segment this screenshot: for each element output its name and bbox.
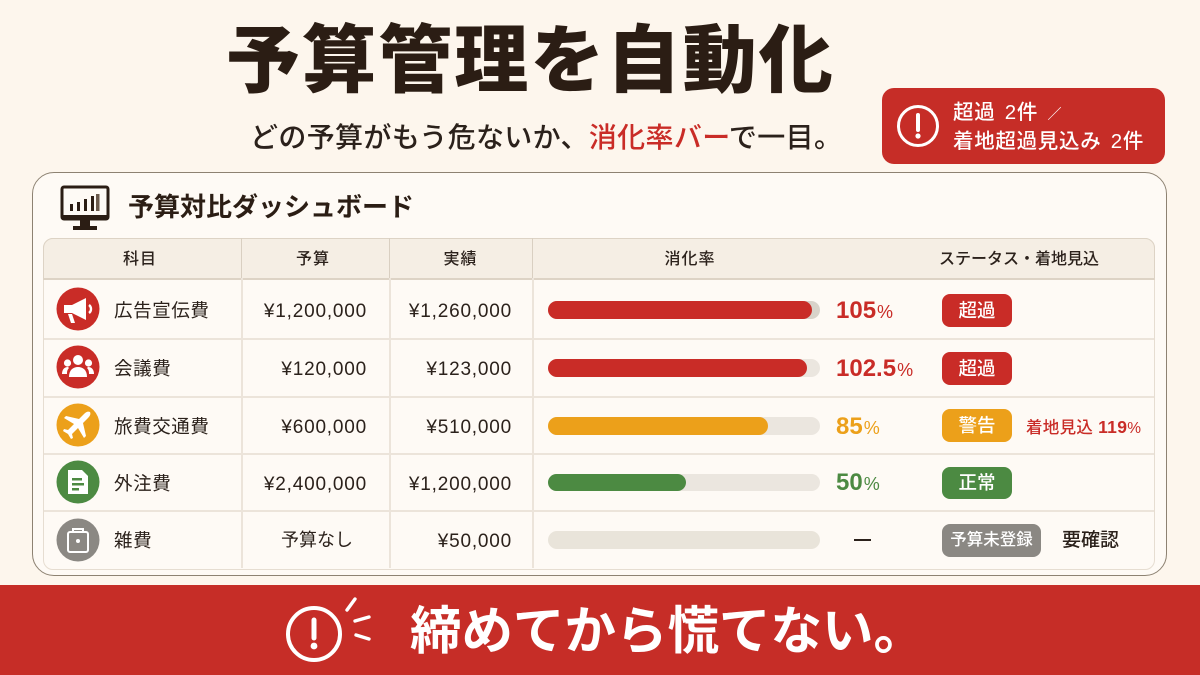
footer banner xyxy=(0,585,1200,675)
column header: ステータス・着地見込: ステータス・着地見込 xyxy=(939,251,1099,268)
row 2 icon: people xyxy=(56,346,100,388)
row 2 budget: ¥120,000 xyxy=(281,359,367,380)
badge text xyxy=(953,101,1144,153)
row 3 actual: ¥510,000 xyxy=(426,417,512,438)
row 2 percent: 102.5% xyxy=(836,355,913,382)
row 2 name: 会議費 xyxy=(114,358,171,379)
row 4 bar xyxy=(548,474,820,491)
icon: exclamation with rays xyxy=(286,597,371,662)
row 3 bar xyxy=(548,417,820,435)
row 3 landing forecast: 着地見込 119% xyxy=(1026,417,1141,437)
title: 予算管理を自動化 xyxy=(226,19,835,102)
badge text: 超過 2件 ／ xyxy=(953,101,1062,124)
row 2 actual: ¥123,000 xyxy=(426,359,512,380)
row 4 status: 正常 xyxy=(958,472,996,493)
row 3 name: 旅費交通費 xyxy=(114,416,210,437)
row 3 icon: airplane xyxy=(56,404,100,446)
footer message: 締めてから慌てない。 xyxy=(410,602,925,660)
row 1 percent: 105% xyxy=(836,297,893,324)
row 4 actual: ¥1,200,000 xyxy=(409,474,512,495)
card heading: 予算対比ダッシュボード xyxy=(128,192,414,222)
table header band xyxy=(43,238,1155,280)
row 5 status: 予算未登録 xyxy=(950,531,1033,549)
subtitle: どの予算がもう危ないか、消化率バーで一目。 xyxy=(250,122,842,153)
row 1 bar xyxy=(548,301,820,319)
row 2 bar xyxy=(548,359,820,377)
row 3 status: 警告 xyxy=(958,415,996,436)
row 5 status xyxy=(942,524,1041,557)
row 5 name: 雑費 xyxy=(114,530,152,551)
column header: 実績: 実績 xyxy=(443,251,478,268)
row 5 actual: ¥50,000 xyxy=(438,531,512,552)
row 1 status: 超過 xyxy=(958,300,996,321)
table frame xyxy=(43,238,1155,570)
row 5 budget: 予算なし xyxy=(281,530,353,550)
row 3 percent: 85% xyxy=(836,413,880,440)
row 5 icon: bag xyxy=(56,518,100,562)
row 3 status xyxy=(942,409,1012,442)
column header: 予算: 予算 xyxy=(296,251,330,268)
row 1 icon: megaphone xyxy=(56,288,100,330)
icon: monitor chart xyxy=(60,186,110,230)
row 4 name: 外注費 xyxy=(114,473,171,494)
badge text: 着地超過見込み 2件 xyxy=(953,130,1144,153)
alert badge xyxy=(882,88,1165,164)
row 1 budget: ¥1,200,000 xyxy=(264,301,367,322)
row 4 budget: ¥2,400,000 xyxy=(264,474,367,495)
row 2 status: 超過 xyxy=(958,358,996,379)
row 4 percent: 50% xyxy=(836,469,880,496)
row 1 status xyxy=(942,294,1012,327)
column header: 消化率: 消化率 xyxy=(664,251,716,268)
row 4 icon: document xyxy=(56,460,100,504)
row 5 bar xyxy=(548,531,820,549)
column header: 科目: 科目 xyxy=(123,251,157,268)
panel: dashboard card xyxy=(32,172,1167,576)
row 4 status xyxy=(942,467,1012,499)
row 3 budget: ¥600,000 xyxy=(281,417,367,438)
row 2 status xyxy=(942,352,1012,385)
row 5 dash xyxy=(854,539,871,541)
icon: exclamation circle xyxy=(897,105,939,147)
row 1 name: 広告宣伝費 xyxy=(114,300,210,321)
row 1 actual: ¥1,260,000 xyxy=(409,301,512,322)
row 5 note: 要確認 xyxy=(1062,530,1119,551)
